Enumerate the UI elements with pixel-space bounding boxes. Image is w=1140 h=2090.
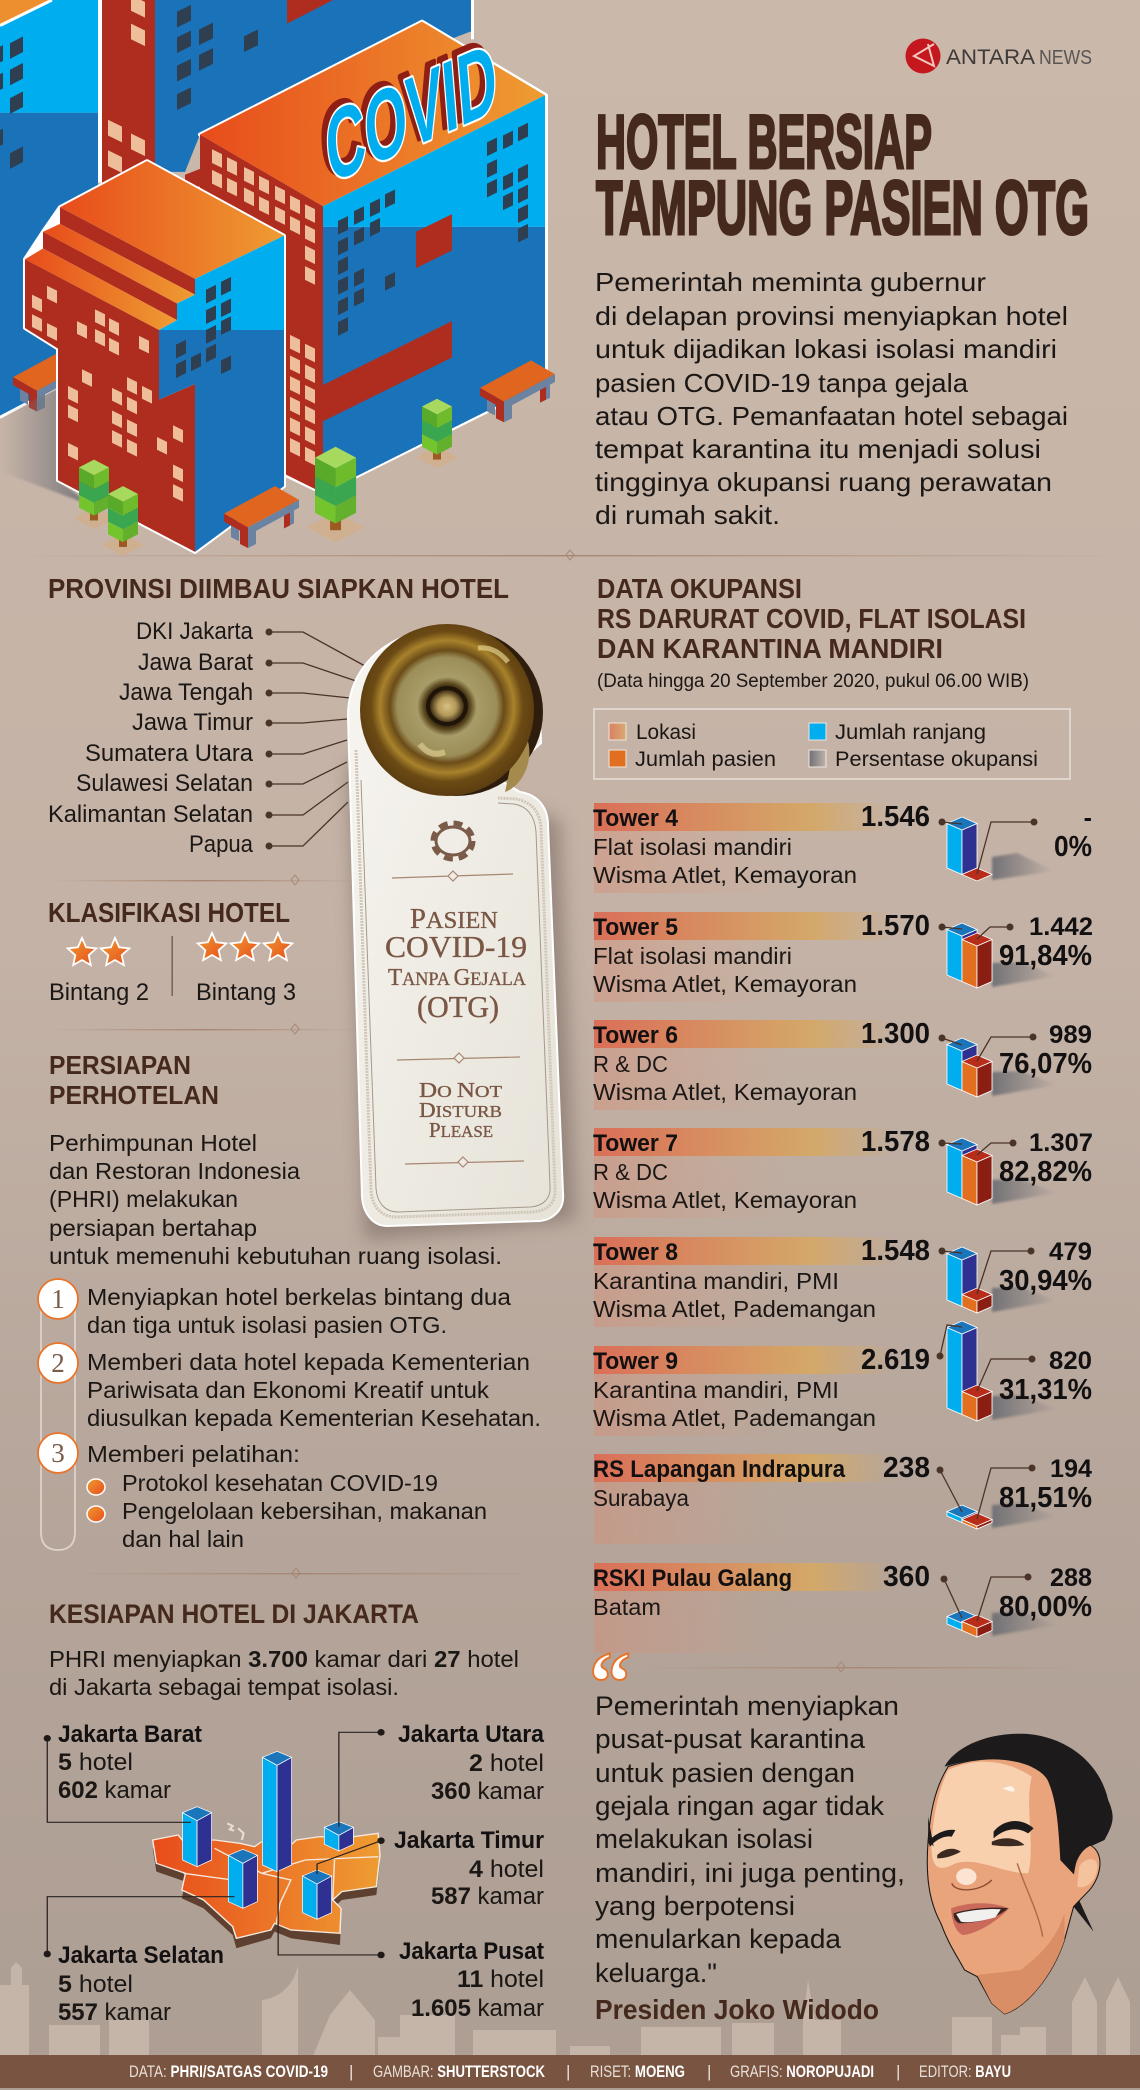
data date note: (Data hingga 20 September 2020, pukul 06.00 WIB)	[597, 671, 1029, 692]
hanger card	[348, 627, 563, 1226]
row: RSKI Pulau Galang: Batam	[593, 1594, 661, 1620]
row: Tower 8: Wisma Atlet, Pademangan	[593, 1296, 876, 1322]
row: RSKI Pulau Galang: 80,00%	[999, 1591, 1092, 1623]
row: Tower 7: 1.307	[1029, 1129, 1093, 1157]
bar: Jakarta Selatan	[228, 1849, 257, 1908]
callout lines	[47, 1732, 381, 1955]
COVID sign	[317, 18, 501, 205]
quote text: menularkan kepada	[595, 1924, 842, 1954]
heading: klasifikasi: KLASIFIKASI HOTEL	[48, 897, 290, 928]
step 1: dan tiga untuk isolasi pasien OTG.	[87, 1312, 447, 1338]
footer credits bar: |	[707, 2062, 711, 2081]
quote attribution: Presiden Joko Widodo	[595, 1994, 879, 2025]
step 3: Pengelolaan kebersihan, makanan	[122, 1498, 487, 1524]
tree: right	[416, 399, 458, 468]
row: Tower 8: 1.548	[861, 1235, 930, 1267]
row: Tower 9: Tower 9	[593, 1348, 678, 1375]
row: RS Lapangan Indrapura: Surabaya	[593, 1485, 689, 1511]
row: RS Lapangan Indrapura	[593, 1452, 1092, 1544]
footer credits bar: RISET: MOENG	[590, 2062, 685, 2081]
persiapan paragraph	[49, 1130, 502, 1269]
row: Tower 6: 989	[1049, 1021, 1092, 1049]
legend: Persentase okupansi	[835, 748, 1038, 771]
building: back centre	[98, 0, 474, 187]
jakarta map with bars and callouts	[44, 1729, 385, 1958]
row: Tower 5: 1.442	[1029, 913, 1093, 941]
row: Tower 6: R & DC	[593, 1051, 668, 1077]
province list with leader lines: Sumatera Utara	[85, 740, 254, 767]
footer credits bar: |	[566, 2062, 570, 2081]
callout: Jakarta Barat: Jakarta Barat	[58, 1721, 202, 1748]
province list with leader lines: Jawa Barat	[138, 649, 253, 676]
persiapan paragraph: Perhimpunan Hotel	[49, 1130, 257, 1156]
row: Tower 4: Tower 4	[593, 805, 679, 832]
quote text: pusat-pusat karantina	[595, 1724, 866, 1754]
bar: Jakarta Utara	[324, 1822, 353, 1851]
quote text: gejala ringan agar tidak	[595, 1791, 885, 1821]
callout: Jakarta Timur: 587 kamar	[431, 1883, 544, 1910]
step 3: Protokol kesehatan COVID-19	[122, 1470, 438, 1496]
heading: persiapan perhotelan: PERHOTELAN	[49, 1080, 219, 1110]
callout: Jakarta Barat: 5 hotel	[58, 1749, 133, 1776]
step 3: dan hal lain	[122, 1526, 244, 1552]
legend	[594, 709, 1070, 779]
step 2: 2	[51, 1348, 65, 1378]
callout: Jakarta Utara: 2 hotel	[469, 1750, 544, 1777]
building: back left	[0, 0, 98, 417]
province list with leader lines: Kalimantan Selatan	[48, 801, 253, 828]
heading: data okupansi	[597, 573, 1026, 664]
callout: Jakarta Utara: Jakarta Utara	[398, 1721, 545, 1748]
door hanger	[348, 624, 575, 1240]
logo: Antara News: NEWS	[1039, 47, 1092, 69]
tree: large centre	[307, 447, 364, 542]
callout: Jakarta Timur: 4 hotel	[469, 1856, 544, 1883]
hanger text: TANPA GEJALA	[388, 965, 526, 991]
callout: Jakarta Barat	[58, 1721, 202, 1804]
heading: kesiapan hotel di jakarta: KESIAPAN HOTEL DI JAKARTA	[49, 1599, 419, 1629]
persiapan paragraph: dan Restoran Indonesia	[49, 1158, 300, 1184]
row: Tower 7: 1.578	[861, 1126, 930, 1158]
heading: persiapan perhotelan: PERSIAPAN	[49, 1050, 191, 1080]
icon: quotation mark: “	[589, 1635, 631, 1732]
row: Tower 7: R & DC	[593, 1159, 668, 1185]
bench: left	[13, 350, 88, 411]
step 3: 3	[51, 1438, 65, 1468]
step 2	[38, 1343, 541, 1431]
row: Tower 8: Karantina mandiri, PMI	[593, 1268, 839, 1294]
row: Tower 5: Wisma Atlet, Kemayoran	[593, 971, 857, 997]
callout: Jakarta Pusat: 1.605 kamar	[411, 1995, 544, 2022]
row: Tower 9: 2.619	[861, 1344, 930, 1376]
row: Tower 8: Tower 8	[593, 1239, 678, 1266]
heading: data okupansi: DAN KARANTINA MANDIRI	[597, 633, 943, 664]
hanger text: PASIEN	[410, 904, 498, 935]
kesiapan paragraph	[49, 1646, 519, 1700]
bar: Jakarta Timur	[303, 1870, 332, 1919]
row: Tower 8: 30,94%	[999, 1265, 1092, 1297]
row: Tower 7: Wisma Atlet, Kemayoran	[593, 1187, 857, 1213]
persiapan paragraph: untuk memenuhi kebutuhan ruang isolasi.	[49, 1243, 502, 1269]
building: main front with COVID sign	[200, 18, 546, 493]
quote text: yang berpotensi	[595, 1891, 795, 1921]
row: Tower 4: -	[1084, 804, 1092, 832]
heading: data okupansi: DATA OKUPANSI	[597, 573, 802, 604]
intro paragraph: Pemerintah meminta gubernur	[595, 267, 986, 297]
callout: Jakarta Utara	[398, 1721, 545, 1805]
row: Tower 5: Tower 5	[593, 914, 678, 941]
row: Tower 4	[593, 801, 1092, 893]
footer credits bar: DATA: PHRI/SATGAS COVID-19	[129, 2062, 328, 2081]
intro paragraph: di delapan provinsi menyiapkan hotel	[595, 301, 1068, 331]
callout: Jakarta Selatan	[58, 1942, 224, 2026]
footer credits bar: EDITOR: BAYU	[919, 2062, 1011, 2081]
province list with leader lines: Papua	[189, 831, 254, 858]
row: RSKI Pulau Galang: 288	[1050, 1564, 1092, 1592]
title	[596, 100, 1089, 251]
logo: Antara News	[906, 38, 1092, 74]
row: Tower 5: Flat isolasi mandiri	[593, 943, 792, 969]
row: RS Lapangan Indrapura: 81,51%	[999, 1482, 1092, 1514]
step 2: diusulkan kepada Kementerian Kesehatan.	[87, 1405, 541, 1431]
footer credits bar	[0, 2055, 1140, 2088]
callout: Jakarta Barat: 602 kamar	[58, 1777, 171, 1804]
bar: Jakarta Pusat	[263, 1751, 292, 1872]
callout: Jakarta Pusat: Jakarta Pusat	[399, 1938, 544, 1965]
intro paragraph: tempat karantina itu menjadi solusi	[595, 434, 1041, 464]
callout: Jakarta Selatan: 557 kamar	[58, 1999, 171, 2026]
row: Tower 7	[593, 1126, 1093, 1218]
quote text: mandiri, ini juga penting,	[595, 1858, 905, 1888]
row: RSKI Pulau Galang: RSKI Pulau Galang	[593, 1565, 792, 1592]
legend: Lokasi	[636, 721, 696, 744]
row: Tower 6: 1.300	[861, 1018, 930, 1050]
row: Tower 9: 31,31%	[999, 1374, 1092, 1406]
hanger text: PLEASE	[429, 1118, 493, 1142]
hotel classification stars	[49, 933, 296, 1006]
step 1: 1	[51, 1284, 65, 1314]
hanger text: DO NOT	[419, 1078, 503, 1102]
legend: Jumlah pasien	[635, 748, 776, 771]
hanger text: DISTURB	[419, 1098, 502, 1122]
city skyline silhouette	[0, 1962, 1130, 2056]
callout: Jakarta Timur	[394, 1827, 544, 1910]
row: Tower 6	[593, 1018, 1092, 1110]
portrait: Joko Widodo	[927, 1734, 1113, 2014]
row: RSKI Pulau Galang: 360	[883, 1561, 930, 1593]
heading: data okupansi: RS DARURAT COVID, FLAT ISOLASI	[597, 603, 1026, 634]
persiapan paragraph: (PHRI) melakukan	[49, 1186, 238, 1212]
hanger text: COVID-19	[385, 929, 527, 964]
row: Tower 8	[593, 1235, 1092, 1327]
row: RSKI Pulau Galang	[593, 1561, 1092, 1653]
numbered steps	[38, 1279, 541, 1552]
row: Tower 9	[593, 1321, 1092, 1436]
step 2: Pariwisata dan Ekonomi Kreatif untuk	[87, 1377, 490, 1403]
hanger emblem	[433, 823, 473, 859]
persiapan paragraph: persiapan bertahap	[49, 1215, 257, 1241]
row: Tower 7: Tower 7	[593, 1130, 678, 1157]
row: Tower 6: Wisma Atlet, Kemayoran	[593, 1079, 857, 1105]
legend: Jumlah ranjang	[835, 721, 986, 744]
row: RS Lapangan Indrapura: RS Lapangan Indrapura	[593, 1456, 846, 1483]
row: Tower 4: 1.546	[861, 801, 930, 833]
hanger text: (OTG)	[417, 989, 499, 1024]
intro paragraph	[595, 267, 1068, 530]
quote text	[595, 1691, 905, 1988]
hero illustration: isometric hotel buildings	[0, 0, 555, 556]
row: Tower 8: 479	[1049, 1238, 1092, 1266]
province list with leader lines	[48, 618, 365, 858]
step 1	[38, 1279, 511, 1338]
quote text: keluarga."	[595, 1958, 717, 1988]
heading: persiapan perhotelan	[49, 1050, 219, 1110]
quote text: melakukan isolasi	[595, 1824, 813, 1854]
bench: right	[480, 360, 555, 422]
step 2: Memberi data hotel kepada Kementerian	[87, 1349, 530, 1375]
province list with leader lines: DKI Jakarta	[136, 618, 254, 645]
footer credits bar: GAMBAR: SHUTTERSTOCK	[373, 2062, 546, 2081]
callout: Jakarta Utara: 360 kamar	[431, 1778, 544, 1805]
province list with leader lines: Sulawesi Selatan	[76, 770, 253, 797]
callout: Jakarta Selatan: 5 hotel	[58, 1971, 133, 1998]
hanger text	[385, 904, 527, 1142]
ground shadow	[0, 388, 92, 506]
row: Tower 5	[593, 910, 1093, 1002]
row: Tower 4: Wisma Atlet, Kemayoran	[593, 862, 857, 888]
footer credits bar: GRAFIS: NOROPUJADI	[730, 2062, 874, 2081]
tree: left front	[102, 486, 144, 556]
logo: Antara News: ANTARA	[946, 46, 1035, 69]
bar: Jakarta Barat	[183, 1807, 212, 1867]
row: Tower 4: 0%	[1054, 831, 1092, 863]
row: Tower 4: Flat isolasi mandiri	[593, 834, 792, 860]
intro paragraph: tingginya okupansi ruang perawatan	[595, 467, 1052, 497]
step 3	[38, 1433, 487, 1552]
callout: Jakarta Selatan: Jakarta Selatan	[58, 1942, 224, 1969]
row: Tower 7: 82,82%	[999, 1156, 1092, 1188]
step 1: Menyiapkan hotel berkelas bintang dua	[87, 1284, 511, 1310]
callout: Jakarta Pusat: 11 hotel	[457, 1966, 544, 1993]
hotel classification stars: Bintang 3	[196, 979, 296, 1006]
building: small front with stepped roof	[25, 161, 284, 552]
row: RS Lapangan Indrapura: 238	[883, 1452, 930, 1484]
intro paragraph: di rumah sakit.	[595, 500, 780, 530]
row: Tower 9: 820	[1049, 1347, 1092, 1375]
callout: Jakarta Timur: Jakarta Timur	[394, 1827, 544, 1854]
quote text: untuk pasien dengan	[595, 1758, 855, 1788]
callout: Jakarta Pusat	[399, 1938, 544, 2022]
intro paragraph: atau OTG. Pemanfaatan hotel sebagai	[595, 401, 1068, 431]
intro paragraph: untuk dijadikan lokasi isolasi mandiri	[595, 334, 1057, 364]
quote text: Pemerintah menyiapkan	[595, 1691, 899, 1721]
row: Tower 5: 91,84%	[999, 940, 1092, 972]
row: Tower 6: Tower 6	[593, 1022, 678, 1049]
row: Tower 6: 76,07%	[999, 1048, 1092, 1080]
brass door knob	[360, 624, 543, 796]
heading: provinsi: PROVINSI DIIMBAU SIAPKAN HOTEL	[48, 573, 509, 604]
kesiapan paragraph: PHRI menyiapkan 3.700 kamar dari 27 hotel	[49, 1646, 519, 1672]
kesiapan paragraph: di Jakarta sebagai tempat isolasi.	[49, 1674, 399, 1700]
footer credits bar: |	[349, 2062, 353, 2081]
row: Tower 5: 1.570	[861, 910, 930, 942]
bench: centre	[224, 486, 299, 548]
row: Tower 9: Wisma Atlet, Pademangan	[593, 1405, 876, 1431]
intro paragraph: pasien COVID-19 tanpa gejala	[595, 368, 969, 398]
hotel classification stars: Bintang 2	[49, 979, 149, 1006]
province list with leader lines: Jawa Timur	[132, 709, 253, 736]
row: Tower 9: Karantina mandiri, PMI	[593, 1377, 839, 1403]
row: RS Lapangan Indrapura: 194	[1050, 1455, 1092, 1483]
step 3: Memberi pelatihan:	[87, 1441, 300, 1467]
footer credits bar: |	[896, 2062, 900, 2081]
province list with leader lines: Jawa Tengah	[119, 679, 253, 706]
tree: left	[73, 460, 115, 529]
